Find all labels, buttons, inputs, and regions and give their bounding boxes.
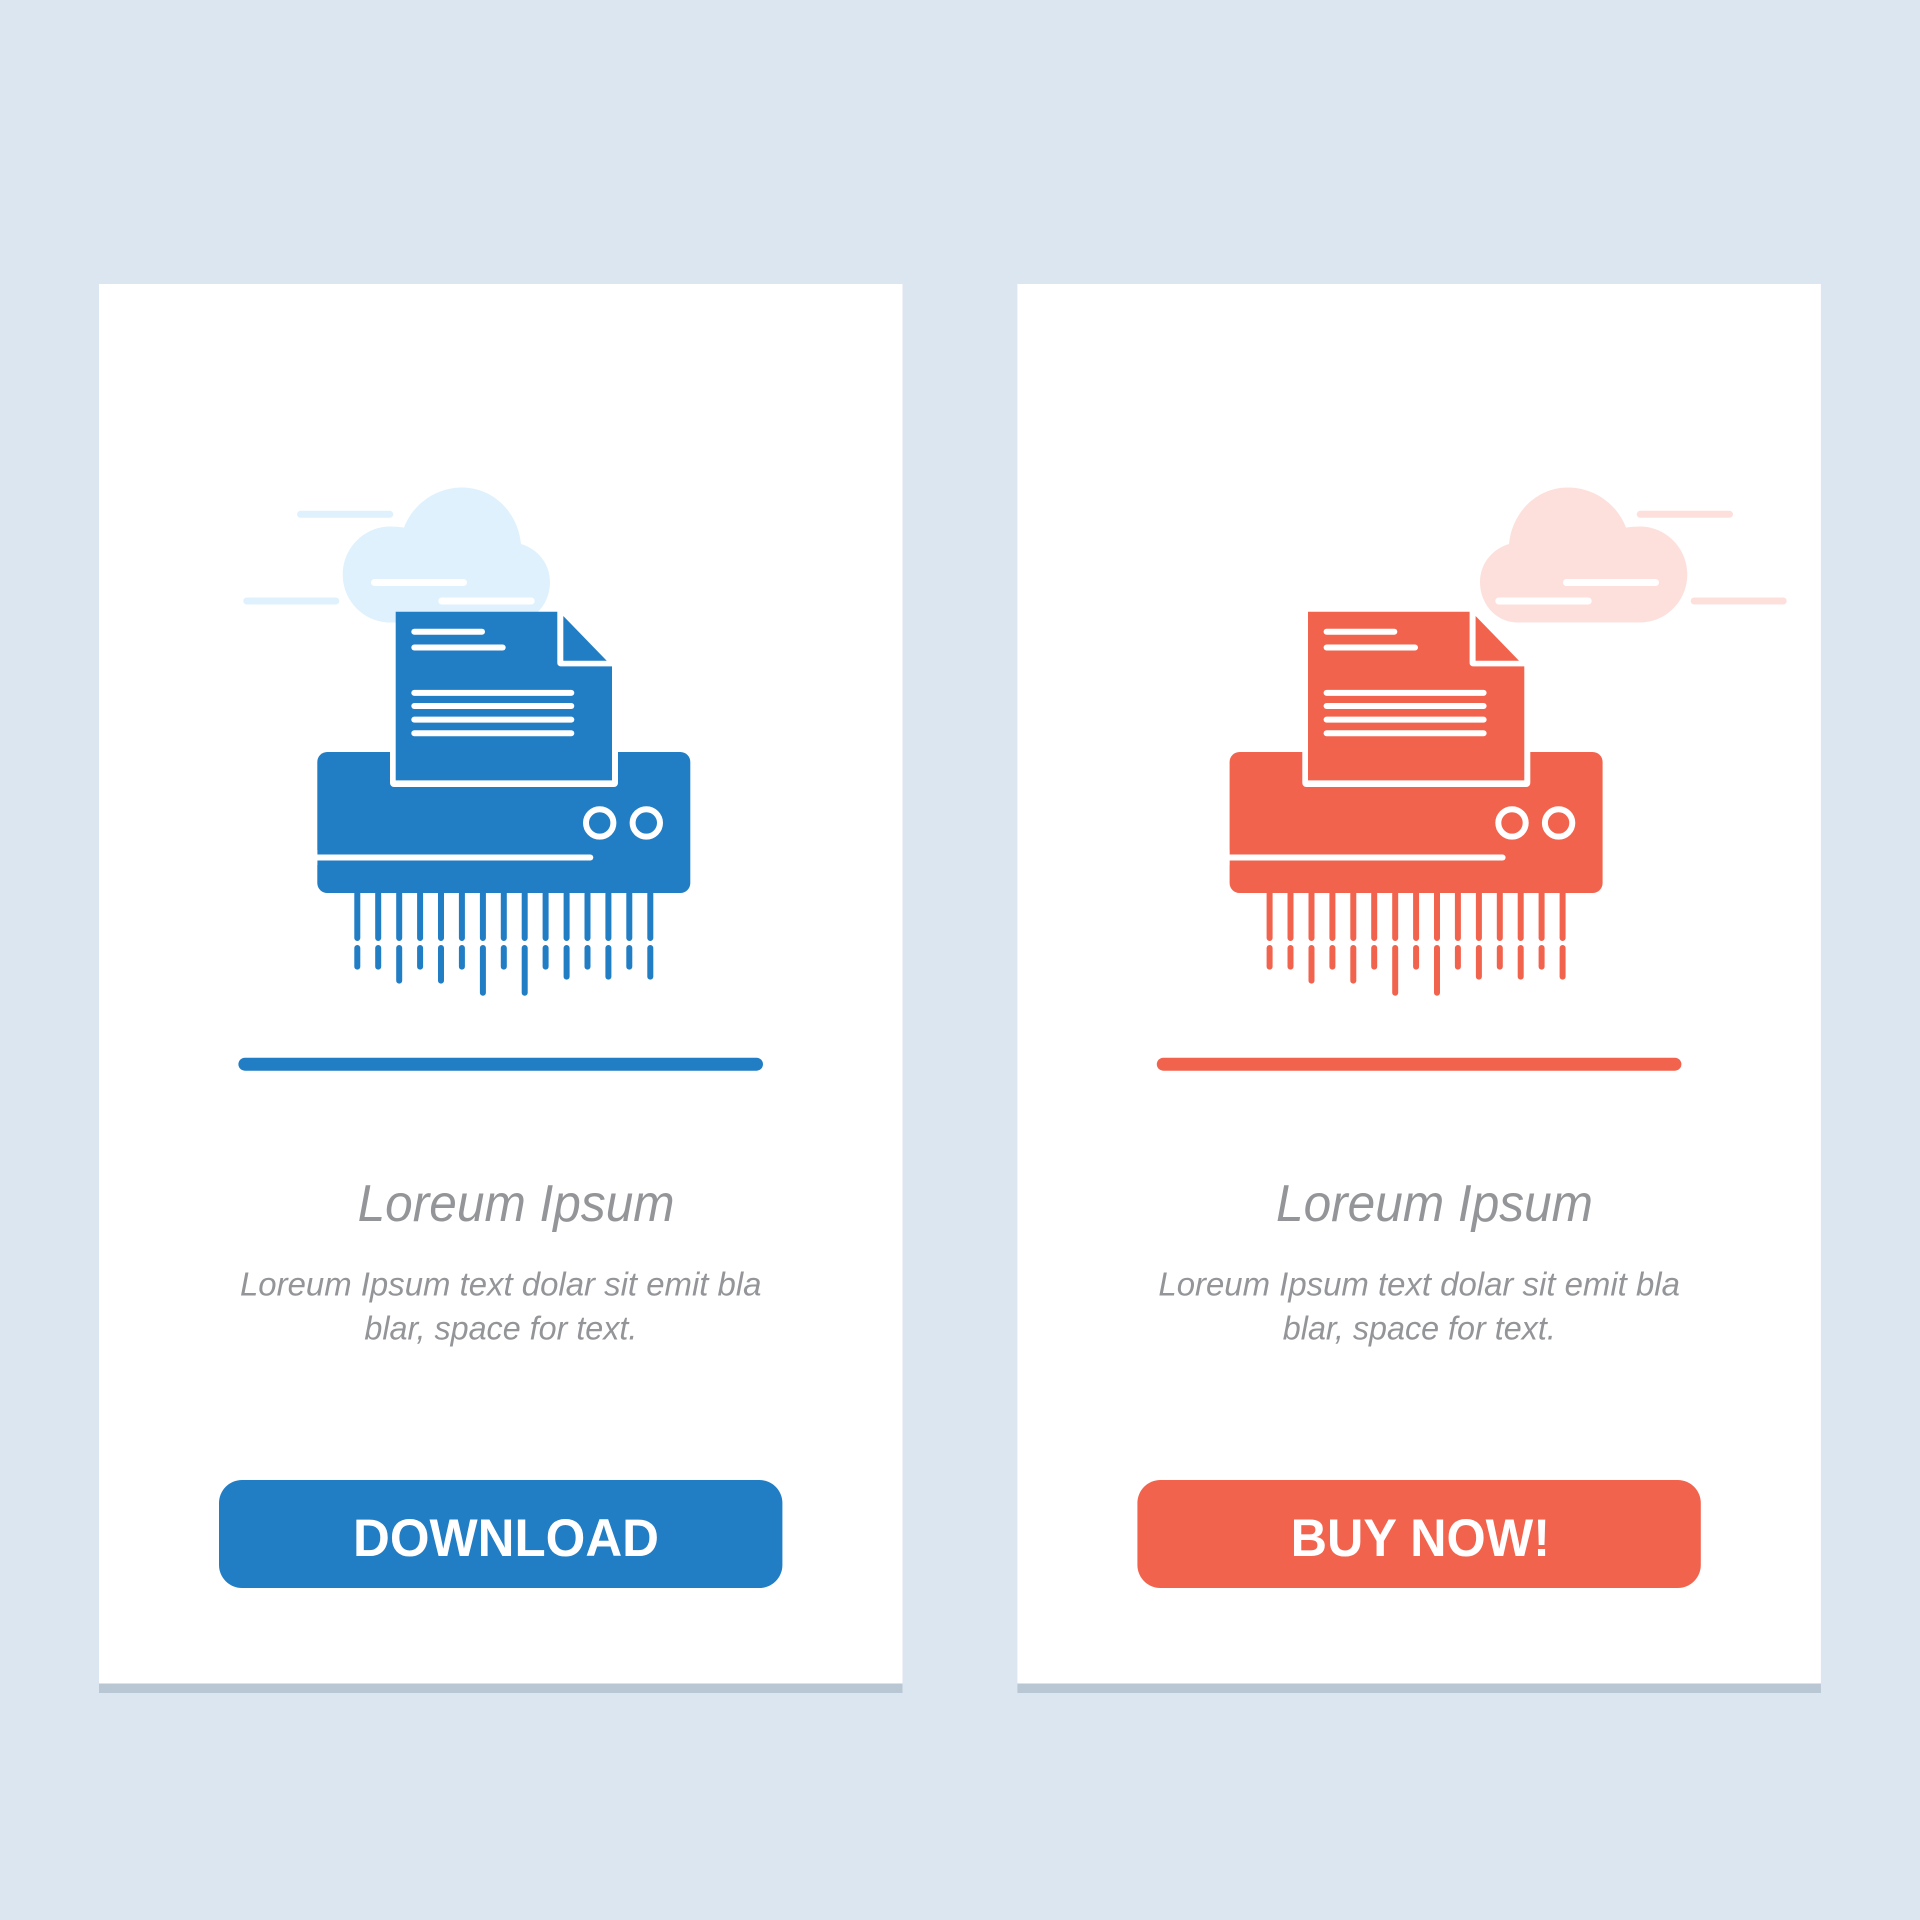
document folded corner [1476,616,1519,661]
body text [240,1266,762,1347]
icon: cloud with streaks [1480,488,1783,622]
card background with bottom shadow [1017,284,1821,1693]
shredder bar [1230,854,1503,860]
shredder body [1230,752,1603,893]
divider bar [238,1058,763,1071]
heading: Loreum Ipsum [358,1175,675,1233]
divider bar [1157,1058,1681,1071]
button: download: DOWNLOAD [353,1509,659,1568]
shredded paper strips [1270,893,1563,993]
body text: Loreum Ipsum text dolar sit emit bla [240,1266,762,1302]
document folded corner [563,616,607,661]
button: download [219,1480,782,1588]
paper slot outline [390,745,618,787]
body text: blar, space for text. [364,1310,637,1347]
card background with bottom shadow [99,284,902,1693]
body text [1158,1266,1680,1347]
paper slot outline [1302,745,1530,787]
shredded paper strips [357,893,650,993]
heading: Loreum Ipsum [1276,1175,1593,1233]
document text lines [1327,632,1484,733]
shredder buttons [1498,809,1572,837]
button: buy now [1137,1480,1701,1588]
document sheet [396,612,612,780]
document sheet [1308,612,1524,780]
button: buy now: BUY NOW! [1291,1509,1550,1568]
shredder body [317,752,690,893]
document text lines [414,632,571,733]
shredder bar [317,854,590,860]
panel: blue download card [99,284,902,1693]
body text: Loreum Ipsum text dolar sit emit bla [1158,1266,1680,1302]
body text: blar, space for text. [1283,1310,1556,1347]
panel: red buy card [1017,284,1821,1693]
icon: shredder with document [1222,612,1603,993]
icon: cloud with streaks [247,488,550,622]
icon: shredder with document [310,612,690,993]
shredder buttons [586,809,660,837]
